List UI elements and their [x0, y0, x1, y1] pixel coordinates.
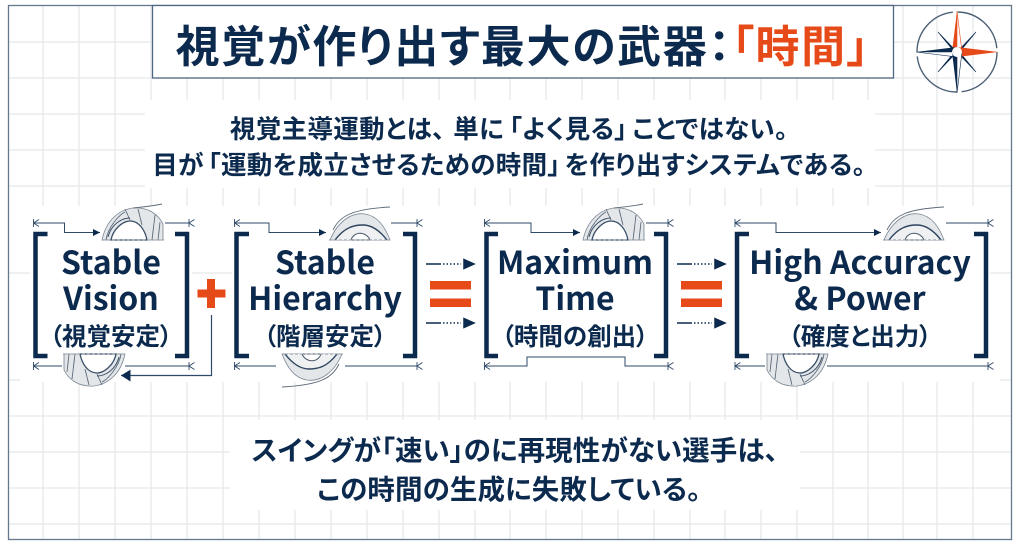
label: & Power	[794, 274, 926, 320]
icon: compass	[916, 11, 998, 93]
label: Time	[535, 274, 615, 320]
dimension lines	[34, 223, 100, 232]
arrows: to Maximum Time	[426, 260, 474, 328]
anatomy sketch	[583, 204, 645, 240]
label: Vision	[62, 274, 159, 320]
label	[50, 238, 172, 353]
conclusion text: スイングが「速い」のに再現性がない選手は、	[252, 428, 778, 468]
dimension lines	[484, 223, 580, 232]
intro text	[152, 109, 866, 182]
bracket	[36, 234, 187, 356]
equals sign 2	[681, 281, 722, 307]
label: Maximum	[497, 238, 653, 284]
panel: High Accuracy & Power	[735, 207, 988, 386]
label: High Accuracy	[749, 238, 971, 284]
label: Stable	[61, 238, 161, 284]
label: Hierarchy	[248, 274, 402, 320]
label: （確度と出力）	[789, 318, 931, 353]
bracket	[236, 234, 415, 356]
panel: Stable Vision	[34, 204, 189, 386]
label: （視覚安定）	[50, 318, 172, 353]
panel: Stable Hierarchy	[234, 207, 417, 387]
label	[248, 238, 402, 353]
label: （階層安定）	[264, 318, 386, 353]
plus sign	[198, 279, 226, 308]
bracket	[486, 234, 666, 356]
feedback arrow	[121, 315, 212, 376]
dimension lines	[735, 223, 881, 232]
conclusion text	[252, 428, 778, 507]
anatomy sketches	[63, 204, 164, 386]
intro text: 視覚主導運動とは、 単に「よく見る」ことではない。	[230, 109, 788, 146]
label: Stable	[275, 238, 375, 284]
conclusion text: この時間の生成に失敗している。	[317, 467, 701, 507]
intro text: 目が「運動を成立させるための時間」を作り出すシステムである。	[152, 145, 866, 182]
title: 視覚が作り出す最大の武器：「時間」	[176, 11, 870, 75]
dimension lines	[234, 223, 326, 232]
panel: Maximum Time	[484, 204, 668, 366]
label: （時間の創出）	[502, 318, 648, 353]
label	[497, 238, 653, 353]
anatomy sketches	[766, 207, 944, 386]
anatomy sketches	[282, 207, 390, 387]
arrows: to High Accuracy	[677, 260, 725, 328]
bracket	[737, 234, 986, 356]
equals sign 1	[430, 281, 471, 307]
title box	[152, 6, 894, 78]
halo masks over grid	[20, 100, 1000, 510]
label	[749, 238, 971, 353]
